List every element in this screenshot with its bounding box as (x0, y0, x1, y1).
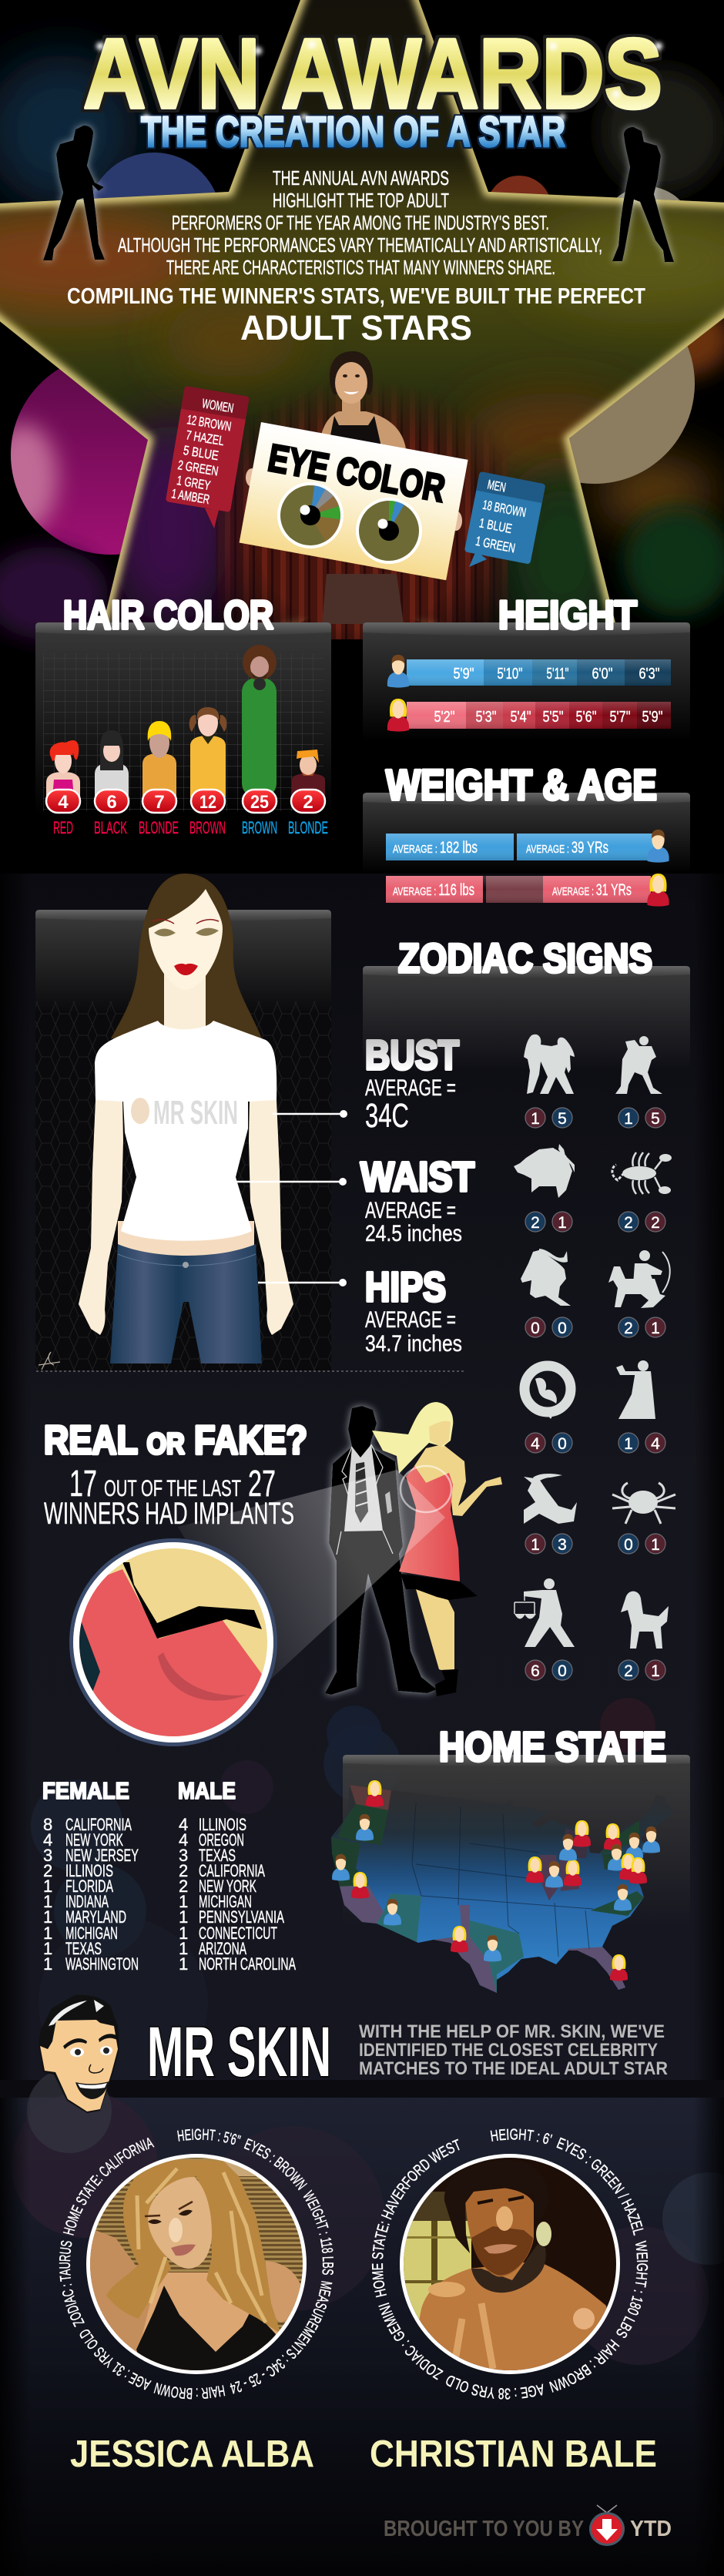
bar: male height: 6'0" (592, 666, 613, 683)
bars: male weight and age (386, 830, 669, 863)
man silhouette (325, 1406, 437, 1695)
hair color labels (53, 818, 328, 837)
intro text: HIGHLIGHT THE TOP ADULT (273, 189, 449, 212)
table: male home states: 1 (179, 1924, 188, 1943)
men's eye color tag: 1 GREEN (474, 534, 517, 555)
men's eye color tag: 18 BROWN (481, 498, 528, 520)
logo: YTD (589, 2505, 672, 2546)
table: female home states: MARYLAND (65, 1907, 126, 1927)
table: female home states: 3 (43, 1846, 52, 1865)
table: female home states: 2 (43, 1861, 52, 1880)
callout: bust (273, 1032, 459, 1135)
bars: female weight and age (386, 874, 669, 907)
men's eye color tag: MEN (486, 477, 507, 495)
shirt logo: MR SKIN (131, 1094, 238, 1132)
hair color labels: RED (53, 818, 73, 837)
table: male home states: 4 (179, 1830, 188, 1850)
intro text (118, 166, 602, 279)
text: Mr Skin description (359, 2021, 668, 2079)
men's eye color tag (464, 471, 545, 567)
zodiac count badges: 1 (531, 1110, 540, 1128)
table: female home states: 1 (43, 1907, 52, 1927)
woman holding card (246, 351, 462, 624)
table: female home states: 1 (43, 1954, 52, 1974)
bar: male height: 5'11" (547, 666, 568, 683)
bar: female height: 5'2" (434, 709, 454, 726)
table: male home states: NEW YORK (199, 1877, 256, 1896)
credit: brought to you by: BROUGHT TO YOU BY (384, 2517, 584, 2541)
zodiac count badges: 4 (531, 1435, 540, 1453)
table: male home states: NORTH CAROLINA (199, 1954, 296, 1974)
hair color labels: BLONDE (288, 818, 328, 837)
name: Christian Bale: CHRISTIAN BALE (370, 2433, 657, 2475)
bars: female weight and age: AVERAGE : 31 YRs (552, 881, 632, 899)
zodiac count badges: 5 (558, 1110, 567, 1128)
shirt logo: MR SKIN: MR SKIN (153, 1094, 238, 1132)
table: female home states (42, 1777, 139, 1974)
background: top stage (0, 31, 724, 649)
men's eye color tag: 1 BLUE (478, 515, 513, 536)
icon: taurus (514, 1144, 575, 1198)
table: female home states: FLORIDA (65, 1877, 113, 1896)
logo: YTD: YTD (630, 2517, 672, 2541)
heading: MR SKIN: MR SKIN (147, 2013, 331, 2091)
zodiac count badges: 1 (651, 1320, 660, 1337)
women's eye color tag: 1 GREY (176, 473, 212, 493)
table: female home states: TEXAS (65, 1939, 102, 1958)
eye color card (240, 422, 468, 580)
bars: male weight and age: AVERAGE : 182 lbs (393, 839, 478, 857)
table: male home states: OREGON (199, 1830, 244, 1850)
illustration: couple (325, 1402, 502, 1696)
table: male home states: ARIZONA (199, 1939, 246, 1958)
table: female home states: WASHINGTON (65, 1954, 139, 1974)
spotlight beam (178, 1466, 451, 1682)
table: female home states: 1 (43, 1877, 52, 1896)
value badges (46, 790, 325, 813)
heading: zodiac signs: ZODIAC SIGNS (398, 936, 652, 981)
callout: hips: HIPS (365, 1264, 446, 1310)
curtain backdrop (216, 377, 508, 639)
zodiac count badges: 0 (558, 1435, 567, 1453)
icon: aries (621, 1592, 669, 1649)
value badges: 25 (250, 792, 269, 813)
callout: waist (236, 1154, 474, 1246)
callout: bust: BUST (365, 1032, 459, 1078)
pie chart: men (356, 498, 422, 564)
bar: male height: 6'3" (639, 666, 659, 683)
silhouette: left dancer (43, 126, 105, 260)
heading: hair color: HAIR COLOR (63, 593, 273, 638)
hair color labels: BLONDE (139, 818, 179, 837)
bar: female height: 5'7" (610, 709, 630, 726)
heading: height: HEIGHT (498, 593, 637, 638)
zodiac count badges: 1 (531, 1536, 540, 1554)
table: male home states (178, 1777, 296, 1974)
text: Mr Skin description: IDENTIFIED THE CLOSEST CELEBRITY (359, 2040, 658, 2061)
table: male home states: 2 (179, 1861, 188, 1880)
table: male home states: 2 (179, 1877, 188, 1896)
bar: female height (387, 699, 671, 732)
women's eye color tag: 5 BLUE (183, 443, 220, 463)
pie chart: women (277, 482, 344, 548)
figure: black hair 6 (95, 730, 129, 797)
heading: weight and age: WEIGHT & AGE (386, 760, 657, 809)
value badges: 6 (106, 792, 117, 813)
figure: brown hair 12 (189, 707, 226, 797)
table: female home states: 1 (43, 1939, 52, 1958)
text: implants stat: WINNERS HAD IMPLANTS (44, 1497, 294, 1531)
figure: red hair 4 (46, 740, 80, 797)
table: male home states: CONNECTICUT (199, 1924, 277, 1943)
woman in red dress (372, 1402, 502, 1696)
icon: cancer (612, 1483, 675, 1524)
panel: zodiac signs (363, 936, 690, 1680)
table: female home states: 1 (43, 1892, 52, 1911)
bar: female height: 5'6" (576, 709, 596, 726)
women's eye color tag: WOMEN (201, 396, 235, 416)
bars: female weight and age: AVERAGE : 116 lbs (393, 881, 474, 899)
table: male home states: MALE (178, 1777, 236, 1804)
table: female home states: CALIFORNIA (65, 1815, 132, 1834)
bar: male height: 5'10" (498, 666, 522, 683)
table: male home states: TEXAS (199, 1846, 236, 1865)
hair color labels: BLACK (94, 818, 127, 837)
table: female home states: NEW YORK (65, 1830, 123, 1850)
callout: hips: AVERAGE = (365, 1307, 456, 1333)
women's eye color tag (166, 386, 250, 528)
icon: gemini (524, 1035, 575, 1094)
panel: home state (330, 1724, 690, 1993)
panel: weight and age (363, 760, 690, 907)
figure: blonde male 2 (292, 750, 325, 797)
map pins (332, 1780, 660, 1981)
card heading: EYE COLOR (265, 436, 448, 511)
icon: capricorn (524, 1474, 577, 1524)
zodiac count badges: 1 (558, 1214, 567, 1232)
zodiac count badges: 1 (651, 1536, 660, 1554)
callout: bust: AVERAGE = (365, 1075, 456, 1101)
table: female home states: INDIANA (65, 1892, 109, 1911)
table: male home states: 1 (179, 1939, 188, 1958)
callout: waist: WAIST (360, 1154, 474, 1200)
icon: leo (521, 1249, 571, 1306)
bar: female height: 5'3" (476, 709, 496, 726)
zodiac count badges: 1 (624, 1110, 633, 1128)
women's eye color tag: 2 GREEN (176, 458, 220, 479)
icon: libra (515, 1578, 575, 1647)
figure: brown male 25 (242, 645, 277, 797)
star: gold glowing star shape (0, 0, 724, 622)
portrait: Jessica Alba (85, 2153, 308, 2380)
table: male home states: 4 (179, 1815, 188, 1834)
women's eye color tag: 1 AMBER (170, 486, 211, 507)
zodiac count badges: 3 (558, 1536, 567, 1554)
text: implants stat (44, 1464, 294, 1531)
text: Mr Skin description: MATCHES TO THE IDEAL ADULT STAR (359, 2058, 668, 2079)
map: united states (330, 1785, 674, 1993)
icon: aquarius (615, 1036, 662, 1094)
title sparkles (96, 41, 662, 120)
subtitle: THE CREATION OF A STAR (141, 107, 565, 156)
intro text: THE ANNUAL AVN AWARDS (273, 166, 449, 190)
zodiac count badges: 0 (624, 1536, 633, 1554)
heading: adult stars: ADULT STARS (240, 308, 472, 347)
callout: waist: AVERAGE = (365, 1198, 456, 1223)
zodiac count badges: 1 (651, 1662, 660, 1680)
table: male home states: ILLINOIS (199, 1815, 246, 1834)
table: male home states: CALIFORNIA (199, 1861, 265, 1880)
background: lower body (0, 874, 724, 2098)
heading: home state: HOME STATE (439, 1724, 666, 1770)
text: Mr Skin description: WITH THE HELP OF MR. SKIN, WE'VE (359, 2021, 665, 2042)
bar: male height: 5'9" (453, 666, 474, 683)
table: female home states: NEW JERSEY (65, 1846, 139, 1865)
table: male home states: PENNSYLVANIA (199, 1907, 284, 1927)
value badges: 4 (58, 792, 69, 813)
zoom circle (69, 1538, 277, 1746)
zodiac count badges: 0 (558, 1320, 567, 1337)
icon: virgo (616, 1360, 655, 1419)
table: female home states: MICHIGAN (65, 1924, 118, 1943)
background: celebrity section (0, 2068, 724, 2576)
panel: height (363, 593, 690, 874)
name: Jessica Alba: JESSICA ALBA (70, 2433, 314, 2475)
zodiac count badges: 2 (624, 1214, 633, 1232)
zodiac count badges: 5 (651, 1110, 660, 1128)
table: male home states: MICHIGAN (199, 1892, 252, 1911)
text: implants stat: 17 OUT OF THE LAST 27 (69, 1464, 276, 1504)
zodiac count badges: 2 (651, 1214, 660, 1232)
bar: female height: 5'5" (542, 709, 564, 726)
circular stats: Jessica Alba: HEIGHT : 5'6" EYES : BROWN WEIGHT : 118 LBS MEASUREMENTS : 34C - 25 - 24 HAIR : BROWN AGE : 31 YRS OLD ZODIAC : TAURUS HOME STATE: CALIFORNIA (59, 2128, 334, 2399)
table: female home states: 1 (43, 1924, 52, 1943)
icon: scorpio (612, 1152, 672, 1194)
zodiac count badges: 4 (651, 1435, 660, 1453)
women's eye color tag: 12 BROWN (186, 412, 233, 434)
portrait: Christian Bale (400, 2153, 624, 2376)
figure: blonde hair 7 (142, 721, 176, 797)
icon: pisces (525, 1366, 571, 1419)
bars: male weight and age: AVERAGE : 39 YRs (526, 839, 608, 857)
women's eye color tag: 7 HAZEL (185, 428, 225, 448)
callout: hips: 34.7 inches (365, 1331, 462, 1357)
zodiac count badges (525, 1108, 665, 1680)
zodiac count badges: 1 (624, 1435, 633, 1453)
zodiac count badges: 2 (624, 1320, 633, 1337)
illustration: woman (79, 874, 293, 1363)
callout: waist: 24.5 inches (365, 1221, 462, 1246)
bar: female height: 5'4" (510, 709, 531, 726)
value badges: 7 (154, 792, 165, 813)
panel: hair color (35, 593, 331, 837)
table: female home states: 4 (43, 1830, 52, 1850)
value badges: 12 (199, 792, 216, 813)
panel: body measurements (35, 910, 466, 1371)
zodiac count badges: 2 (624, 1662, 633, 1680)
zodiac count badges: 0 (558, 1662, 567, 1680)
table: female home states: 8 (43, 1815, 52, 1834)
zodiac count badges: 6 (531, 1662, 540, 1680)
hair color labels: BROWN (189, 818, 226, 837)
table: male home states: 1 (179, 1892, 188, 1911)
hair color labels: BROWN (242, 818, 277, 837)
table: male home states: 3 (179, 1846, 188, 1865)
table: male home states: 1 (179, 1907, 188, 1927)
zodiac count badges: 0 (531, 1320, 540, 1337)
table: female home states: FEMALE (42, 1777, 129, 1804)
silhouette: right dancer (612, 127, 674, 262)
heading: real or fake: REAL OR FAKE? (44, 1418, 307, 1463)
icon: Mr Skin cartoon face (39, 1995, 119, 2113)
value badges: 2 (303, 792, 313, 813)
bar: male height (387, 655, 671, 688)
zodiac count badges: 2 (531, 1214, 540, 1232)
table: female home states: ILLINOIS (65, 1861, 113, 1880)
bar: female height: 5'9" (642, 709, 662, 726)
circular stats: Christian Bale: HEIGHT : 6' EYES : GREEN / HAZEL WEIGHT : 180 LBS HAIR : BROWN AGE : 38 YRS OLD ZODIAC : GEMINI HOME STATE: HAVERFORD WEST (371, 2128, 649, 2400)
icon: sagittarius (608, 1250, 670, 1308)
table: male home states: 1 (179, 1954, 188, 1974)
callout: hips (258, 1264, 462, 1357)
callout: bust: 34C (365, 1097, 409, 1135)
